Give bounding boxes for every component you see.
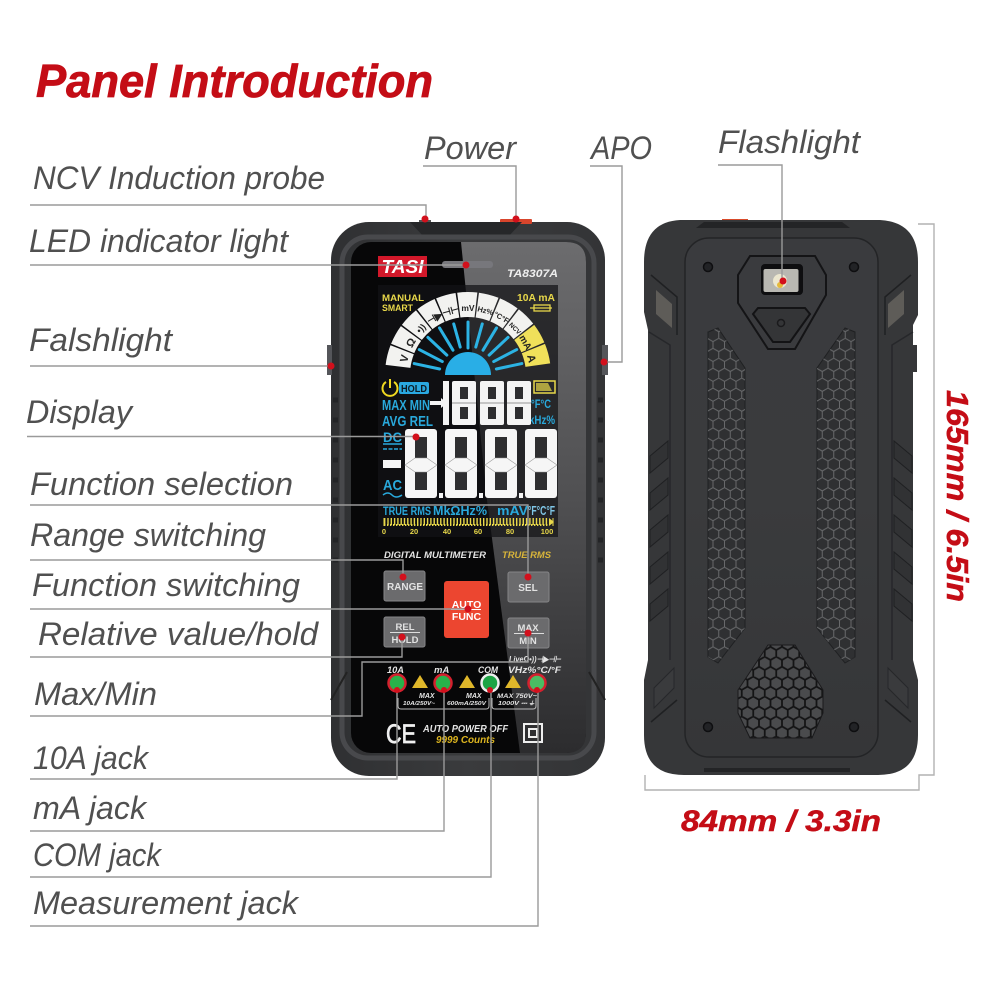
jack ratings: MAX 750V~: [497, 693, 537, 700]
callout: LED indicator light: [29, 223, 470, 268]
bar graph scale: 0: [382, 527, 386, 536]
brand logo TASI: TASI: [382, 257, 425, 277]
callout: Function switching: Function switching: [32, 567, 300, 603]
status labels: MAX MIN: [382, 397, 430, 414]
button: sel: [508, 572, 549, 602]
mode labels: 10A mA: [517, 293, 555, 304]
callout: Measurement jack: Measurement jack: [33, 885, 300, 921]
callout: NCV induction probe: [30, 160, 428, 222]
callout: Power: Power: [424, 130, 517, 166]
callout: Power: [423, 130, 520, 222]
jack ratings: MAX: [466, 693, 483, 700]
status labels: AVG REL: [382, 413, 433, 430]
callout: mA jack: mA jack: [33, 790, 148, 826]
callout: Range switching: [30, 517, 406, 580]
callout: Range switching: Range switching: [30, 517, 266, 553]
button: auto func: AUTO: [452, 599, 481, 611]
back body: [644, 219, 918, 775]
double insulation icon: [524, 724, 542, 742]
callout: Function selection: Function selection: [30, 466, 293, 502]
model number: TA8307A: [507, 268, 558, 280]
bar graph scale: 60: [474, 527, 482, 536]
bar graph scale: [382, 527, 553, 536]
button: rel hold: REL: [396, 622, 415, 633]
bar graph scale: 80: [506, 527, 514, 536]
button: max min: [508, 618, 549, 648]
grip: left honeycomb: [708, 328, 745, 663]
callout: Max/Min: Max/Min: [34, 676, 157, 712]
unit row: mAV: [497, 503, 528, 518]
button: range: [384, 571, 425, 601]
jack ratings: 600mA/250V: [447, 701, 488, 707]
jack ratings: 1000V ⎓ ⏚: [498, 700, 535, 707]
bar graph scale: 40: [443, 527, 451, 536]
button: max min: MIN: [519, 636, 537, 647]
device: back view: [644, 219, 918, 775]
jack labels: VHz%°C/°F: [508, 665, 561, 676]
dial function labels: V: [398, 353, 412, 364]
main reading digits: [383, 429, 557, 498]
callout: COM jack: COM jack: [33, 837, 163, 873]
dial function labels: ⊣▶: [425, 309, 446, 327]
dial function labels: NCV: [507, 322, 522, 337]
jack labels: [387, 654, 561, 676]
button: range: RANGE: [387, 582, 423, 593]
CE mark: CE: [386, 719, 416, 749]
jack ratings: 10A/250V~: [403, 701, 436, 707]
callout: LED indicator light: LED indicator light: [29, 223, 289, 259]
jack labels: 10A: [387, 665, 404, 676]
dial function labels: A: [524, 353, 538, 364]
warning triangles: [412, 675, 521, 688]
blue semicircle: [445, 352, 491, 375]
jack labels: COM: [478, 665, 499, 676]
callout: NCV induction probe: NCV Induction probe: [33, 160, 325, 196]
grip: right honeycomb: [817, 328, 855, 663]
button: rel hold: HOLD: [392, 635, 419, 646]
dial function labels: Hz%: [477, 304, 494, 317]
unit row: [383, 503, 555, 518]
analog bar graph: [384, 518, 554, 526]
callout: APO: [589, 130, 652, 366]
dial function labels: •)): [414, 322, 428, 335]
camera housing: [738, 256, 826, 349]
jack: mA: [434, 674, 452, 692]
status labels: AC: [383, 477, 402, 494]
jack: 10A: [388, 674, 406, 692]
dimension bracket: [645, 224, 934, 790]
dimension: width: 84mm / 3.3in: [681, 805, 881, 838]
screws: [704, 262, 858, 732]
callout: Max/Min: [30, 630, 532, 716]
grip: bottom honeycomb: [738, 645, 823, 738]
callout: mA jack: [30, 687, 447, 831]
dial function labels: °C°F: [492, 310, 511, 326]
dimension: height: 165mm / 6.5in: [940, 390, 975, 602]
dial function labels: [398, 303, 538, 364]
mode labels: SMART: [382, 303, 413, 313]
caption: digital multimeter: DIGITAL MULTIMETER: [384, 550, 487, 560]
bar graph scale: 100: [541, 527, 553, 536]
caption: true rms: TRUE RMS: [502, 550, 551, 560]
callout: Function selection: [30, 466, 532, 580]
jack labels: LiveΩ•))⊣▶⊣⊢: [509, 654, 561, 664]
status labels: DC: [383, 429, 402, 445]
back button: [753, 308, 810, 342]
mode labels: MANUAL: [382, 293, 424, 304]
callout: Measurement jack: [30, 687, 540, 926]
9999 counts: 9999 Counts: [436, 735, 495, 746]
screen glass: [351, 242, 586, 753]
dial function labels: mV: [461, 303, 475, 313]
flashlight lens: [761, 264, 803, 295]
auto power off: AUTO POWER OFF: [422, 723, 509, 735]
HOLD badge: HOLD: [401, 383, 427, 395]
function arc dial: [369, 276, 567, 474]
callout: Flashlight: [718, 124, 861, 284]
small reading digits: [430, 381, 531, 425]
LCD panel: [369, 276, 567, 537]
callout: Display: [26, 394, 420, 440]
battery icon: [534, 381, 555, 393]
unit row: MkΩHz%: [433, 503, 487, 518]
status labels: kHz%: [529, 413, 555, 427]
button: auto func: [444, 581, 489, 638]
status labels: °F°C: [531, 397, 551, 411]
button: max min: MAX: [517, 623, 539, 634]
title: Panel Introduction: [36, 55, 433, 107]
bar graph scale: 20: [410, 527, 418, 536]
jack ratings: MAX: [419, 693, 436, 700]
front body: [327, 219, 608, 776]
dial function labels: mA: [516, 333, 534, 352]
button: auto func: FUNC: [452, 611, 481, 623]
button: sel: SEL: [518, 583, 538, 594]
speaker LED pill: [442, 261, 493, 268]
status labels: [382, 397, 555, 497]
unit row: °F°C°F: [528, 503, 555, 518]
callout: Display: Display: [26, 394, 134, 430]
jack ratings: [398, 693, 537, 709]
dial function labels: ⊣⊢: [441, 304, 461, 319]
callout: Function switching: [30, 567, 472, 612]
callout: APO: APO: [589, 130, 652, 166]
callout: Falshlight: [29, 322, 334, 370]
callout: Relative value/hold: Relative value/hold: [38, 616, 319, 652]
mode labels: [382, 293, 555, 313]
blue gauge rays: [414, 322, 522, 369]
callout: Relative value/hold: [30, 616, 406, 657]
callout: Flashlight: Flashlight: [718, 124, 861, 160]
device: front view: [327, 219, 608, 776]
power icon: [383, 379, 398, 396]
button: rel hold: [384, 617, 425, 647]
callout: 10A jack: 10A jack: [33, 740, 150, 776]
callout: COM jack: [30, 687, 493, 877]
jack labels: mA: [434, 665, 449, 676]
callout: Falshlight: Falshlight: [29, 322, 173, 358]
jack: COM: [482, 674, 498, 692]
dial function labels: Ω: [404, 336, 419, 350]
jack: measurement: [528, 674, 546, 692]
unit row: TRUE RMS: [383, 504, 431, 518]
callout: 10A jack: [30, 687, 400, 779]
